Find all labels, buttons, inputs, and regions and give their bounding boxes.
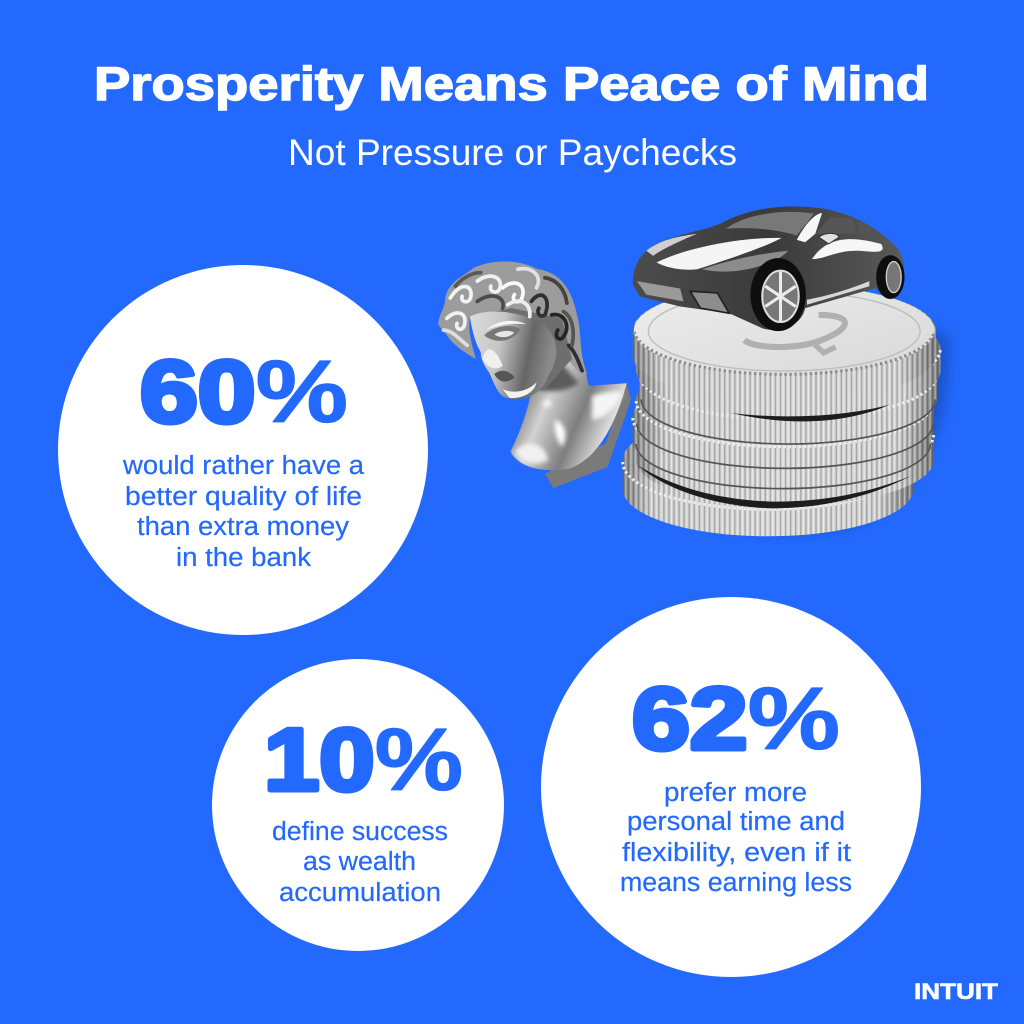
- mirror: [819, 233, 839, 244]
- coin 5: [633, 371, 930, 489]
- neck and chest: [510, 335, 627, 470]
- hood highlight: [656, 238, 782, 270]
- grille: [637, 281, 684, 301]
- 10% figure: 10%: [264, 710, 463, 809]
- hair curls: [444, 269, 582, 371]
- coin 2: [636, 303, 940, 416]
- 60% description: in the bank: [176, 544, 311, 572]
- statue base: [545, 383, 631, 488]
- 62% description: [620, 779, 852, 897]
- 62% figure: 62%: [632, 669, 840, 768]
- 60% figure: 60%: [140, 342, 348, 441]
- coin emblem: [744, 315, 845, 353]
- sports car: [633, 206, 905, 331]
- door highlight: [812, 239, 883, 259]
- front wheel: [750, 258, 806, 331]
- side skirt highlight: [807, 281, 869, 305]
- 60% description: better quality of life: [125, 483, 362, 511]
- headlight: [690, 291, 729, 313]
- bottom coin: [623, 413, 913, 536]
- coin 3: [640, 327, 937, 444]
- windshield: [726, 212, 814, 235]
- 10% description: as wealth: [303, 848, 416, 876]
- 10% description: accumulation: [279, 879, 441, 907]
- title: Prosperity Means Peace of Mind: [94, 57, 929, 110]
- dark gap below coin 2: [646, 371, 930, 421]
- car body: [633, 206, 904, 330]
- 60% description: would rather have a: [122, 452, 365, 480]
- hair: [438, 261, 587, 374]
- head underlay: [470, 308, 572, 393]
- coin stack shadow: [640, 318, 949, 533]
- panel: 62% stat circle: [541, 597, 921, 977]
- 62% description: means earning less: [620, 869, 852, 897]
- face features: [482, 321, 536, 398]
- 62% description: personal time and: [627, 808, 845, 836]
- panel: 60% stat circle: [58, 265, 428, 635]
- 60% description: than extra money: [137, 513, 349, 541]
- statue bust: [438, 261, 631, 488]
- chest highlights: [514, 349, 623, 464]
- 60% description: [122, 452, 365, 572]
- subtitle: Not Pressure or Paychecks: [288, 132, 737, 173]
- coin 4: [636, 354, 934, 469]
- illustration: statue, coins and car: [438, 206, 949, 536]
- logo: Intuit: INTUIT: [914, 979, 999, 1004]
- face: [470, 312, 556, 399]
- top coin: [633, 284, 936, 401]
- 10% description: [272, 818, 448, 907]
- panel: 10% stat circle: [212, 659, 504, 951]
- 10% description: define success: [272, 818, 448, 846]
- coin 6: [636, 388, 934, 508]
- side windows: [815, 217, 874, 235]
- dark gap below coin 6: [638, 465, 912, 508]
- coin stack: [623, 284, 949, 536]
- 62% description: prefer more: [664, 779, 807, 807]
- rear wheel: [876, 255, 905, 299]
- 62% description: flexibility, even if it: [622, 839, 851, 867]
